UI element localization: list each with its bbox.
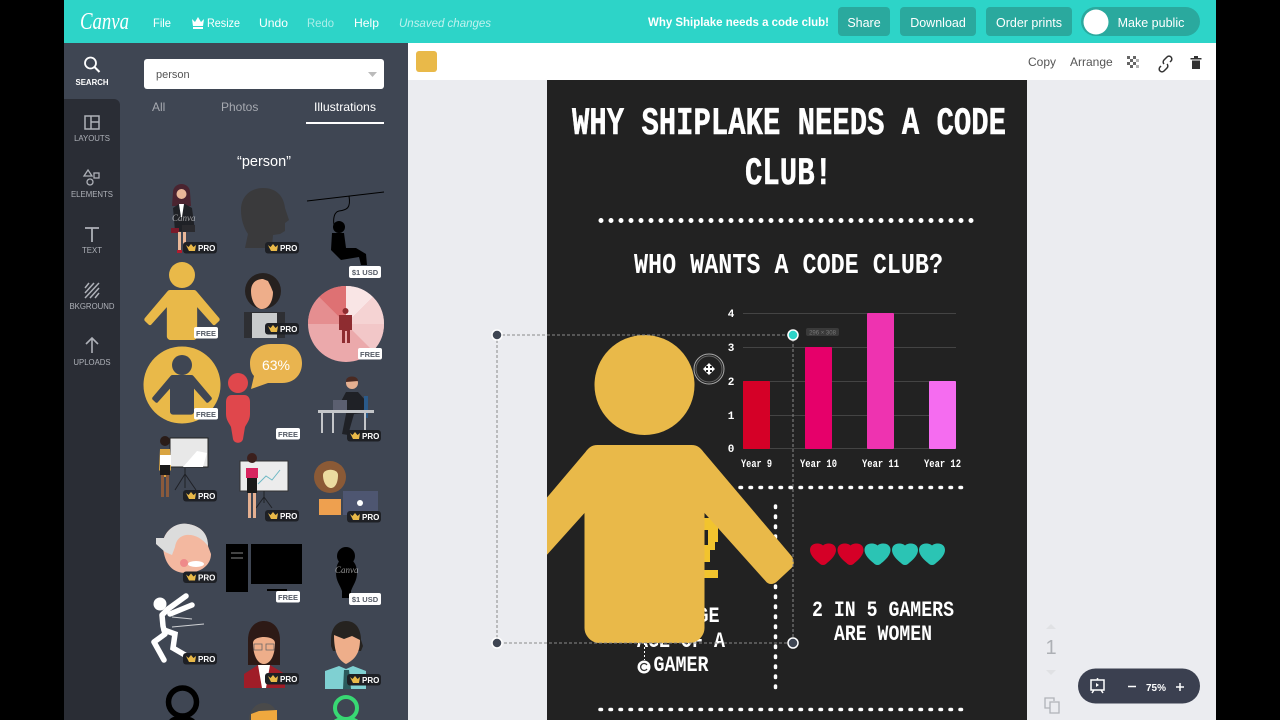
thumbnail: man at desk: PRO: [362, 432, 379, 441]
bar: year 9: [743, 381, 770, 449]
thumbnail: black person: $1 USD: [352, 595, 379, 604]
stat text: average age: AVERAGE: [642, 604, 720, 629]
context toolbar: [408, 43, 1216, 80]
thumbnail: green ring person: [334, 697, 358, 720]
search box: [144, 59, 384, 89]
y axis labels: 3: [728, 343, 735, 355]
y axis labels: 2: [728, 377, 734, 389]
thumbnail: black person: Canva: [335, 565, 359, 575]
divider dots: [600, 708, 968, 711]
thumbnail: yellow person: [144, 262, 220, 340]
thumbnail: pink wheel: FREE: [360, 350, 380, 359]
bar chart: [728, 309, 961, 471]
tabs: All: [152, 100, 165, 114]
action: arrange: Arrange: [1070, 55, 1113, 69]
title: [572, 102, 1006, 196]
size label: [806, 328, 839, 336]
thumbnail: red person with speech bubble: 63%: [262, 357, 290, 373]
thumbnail: chairlift silhouette: [307, 192, 384, 278]
bar: year 11: [867, 313, 894, 449]
thumbnail: running figure: [154, 596, 217, 664]
search box: person: [156, 69, 190, 81]
document name: Why Shiplake needs a code club!: [648, 15, 829, 29]
thumbnail: old man's head: [156, 524, 217, 583]
y axis labels: [728, 309, 735, 456]
logo: Canva: [80, 9, 129, 35]
thumbnail: seated woman: PRO: [198, 244, 215, 253]
move cursor: [694, 354, 724, 384]
thumbnail: running figure: PRO: [198, 655, 215, 664]
icon: link: [1159, 56, 1172, 72]
icon: trash: [1190, 56, 1202, 69]
thumbnail: pink wheel: [308, 286, 384, 362]
top bar: [64, 0, 1216, 43]
thumbnail: woman with laptop: [314, 461, 381, 522]
stat text: average age: GAMER: [654, 653, 709, 678]
down chevron: [1046, 670, 1056, 675]
thumbnail: man at desk: [318, 376, 381, 442]
thumbnail: woman with glasses: PRO: [280, 675, 297, 684]
thumbnail: presenter with whiteboard: PRO: [198, 492, 215, 501]
icon: uploads: UPLOADS: [73, 358, 111, 367]
zoom control: 75%: [1146, 683, 1166, 694]
thumbnail: presenter with chart: [240, 453, 299, 522]
thumbnail: seated woman: Canva: [172, 213, 196, 223]
menu: undo: Undo: [259, 16, 288, 30]
icon: text: [82, 228, 102, 255]
icon: present: [1091, 678, 1104, 693]
stat text: average age: AGE OF A: [637, 629, 726, 654]
stat text: women gamers: ARE WOMEN: [834, 622, 932, 647]
x axis labels: Year 12: [924, 459, 961, 471]
icon: duplicate page: [1045, 698, 1059, 713]
stat text: women gamers: [812, 598, 954, 647]
button: download: [900, 7, 976, 36]
icon: uploads: [73, 338, 111, 367]
icon: search: [76, 58, 109, 87]
status: unsaved changes: Unsaved changes: [399, 18, 491, 30]
thumbnail: orange head: [249, 703, 278, 720]
size label: 296 × 308: [809, 330, 837, 336]
thumbnail: presenter with chart: PRO: [280, 512, 297, 521]
thumbnail: red person with speech bubble: [226, 344, 302, 443]
thumbnail: dark-haired person: [244, 273, 299, 338]
title: CLUB!: [745, 152, 832, 196]
thumbnail: yellow circle with person: FREE: [196, 410, 216, 419]
toggle: make public: Make public: [1118, 16, 1184, 30]
tabs: Illustrations: [314, 100, 376, 114]
page number: 1: [1045, 637, 1057, 659]
colour swatch: [416, 51, 437, 72]
button: share: Share: [847, 16, 881, 30]
icon: text: TEXT: [82, 246, 102, 255]
icon: elements: ELEMENTS: [71, 190, 113, 199]
icon: elements: [71, 170, 113, 199]
thumbnail: man with tie: [325, 621, 381, 689]
thumbnail: dark-haired person: PRO: [280, 325, 297, 334]
thumbnail: presenter with whiteboard: [159, 436, 217, 502]
button: order prints: [986, 7, 1072, 36]
thumbnail: man with tie: PRO: [362, 676, 379, 685]
y axis labels: 0: [728, 444, 734, 456]
x axis labels: [741, 459, 961, 471]
menu: file: File: [153, 16, 171, 30]
thumbnail: desktop computer: FREE: [278, 593, 298, 602]
tabs: [152, 100, 384, 124]
x axis labels: Year 9: [741, 459, 772, 471]
stat text: women gamers: 2 IN 5 GAMERS: [812, 598, 954, 623]
icon: background: BKGROUND: [69, 302, 115, 311]
page controls: [1045, 624, 1059, 713]
thumbnail: red person with speech bubble: FREE: [278, 430, 298, 439]
menu: redo: Redo: [307, 16, 334, 30]
x axis labels: Year 11: [862, 459, 899, 471]
vertical divider dots: [774, 506, 777, 688]
thumbnail: seated woman: [171, 184, 217, 254]
button: share: [838, 7, 890, 36]
hearts: [810, 544, 945, 565]
toggle: make public: [1081, 7, 1200, 36]
results heading: “person”: [237, 154, 291, 170]
selected yellow person: [547, 335, 794, 643]
y axis labels: 1: [728, 411, 735, 423]
button: order prints: Order prints: [996, 16, 1062, 30]
section heading: WHO WANTS A CODE CLUB?: [634, 249, 943, 282]
search panel: [120, 43, 408, 720]
thumbnail: black ring person: [168, 688, 196, 720]
menu: resize: [192, 16, 240, 30]
thumbnail: head silhouette: PRO: [280, 244, 297, 253]
thumbnail: yellow circle with person: [144, 346, 220, 424]
divider dots: [601, 218, 974, 223]
title: WHY SHIPLAKE NEEDS A CODE: [572, 102, 1006, 146]
thumbnail: woman with laptop: PRO: [362, 513, 379, 522]
design canvas: [492, 80, 1027, 720]
menu: help: Help: [354, 16, 379, 30]
bar: year 10: [805, 347, 832, 449]
menu: resize: Resize: [207, 16, 240, 30]
thumbnail: woman with glasses: [244, 621, 299, 688]
icon: background: [69, 283, 115, 311]
x axis labels: Year 10: [800, 459, 837, 471]
y axis labels: 4: [728, 309, 735, 321]
action: copy: Copy: [1028, 55, 1056, 69]
thumbnail: old man's head: PRO: [198, 574, 215, 582]
divider dots: [740, 486, 968, 489]
thumbnail: black person: [335, 547, 381, 605]
selection box: [492, 330, 798, 674]
button: download: Download: [910, 16, 966, 30]
tabs: Photos: [221, 100, 258, 114]
up chevron: [1046, 624, 1056, 629]
thumbnail: yellow person: FREE: [196, 329, 216, 338]
bar: year 12: [929, 381, 956, 449]
thumbnail: desktop computer: [226, 544, 302, 602]
icon: layouts: [74, 116, 110, 143]
stat text: average age: [637, 604, 726, 678]
left icon rail: [64, 43, 120, 720]
thumbnail: chairlift silhouette: $1 USD: [352, 268, 379, 277]
icon: transparency: [1127, 56, 1139, 68]
icon: layouts: LAYOUTS: [74, 134, 110, 143]
rotate handle: [638, 660, 650, 674]
zoom control: [1078, 668, 1200, 704]
icon: trophy: [700, 518, 718, 578]
icon: search: SEARCH: [76, 78, 109, 87]
thumbnail: head silhouette: [241, 188, 299, 254]
